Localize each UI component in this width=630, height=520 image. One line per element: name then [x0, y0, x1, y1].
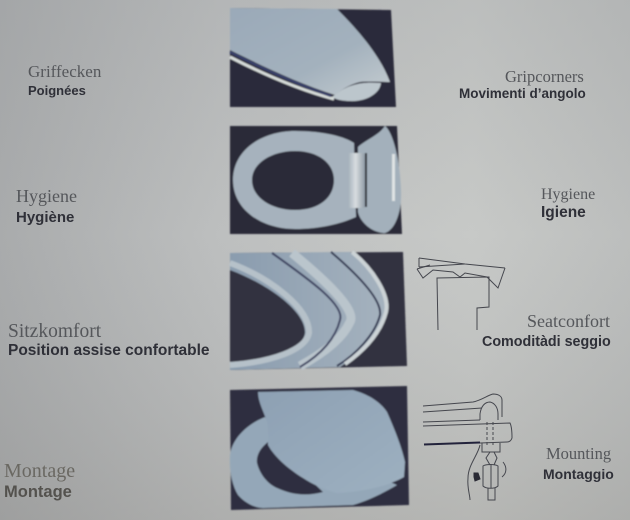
seat ring behind	[230, 417, 397, 508]
lid surface	[230, 8, 390, 95]
label: Sitzkomfort: Sitzkomfort	[8, 321, 102, 342]
groove 2	[331, 252, 380, 366]
seat ring	[233, 131, 356, 229]
diagram: seat cross-section	[417, 258, 505, 330]
label: Sitzkomfort: Position assise confortable	[8, 342, 210, 359]
outer rim light	[345, 252, 387, 364]
base line	[424, 442, 480, 444]
seat rim	[230, 252, 387, 370]
light strip	[230, 57, 334, 99]
label: Seatconfort	[482, 311, 611, 350]
label: Sitzkomfort	[8, 321, 210, 359]
photo: hygiene hinge	[230, 126, 402, 234]
hinge cylinder	[348, 153, 365, 208]
corner lip	[332, 83, 381, 101]
label: Hygiene left: Hygiene	[16, 186, 77, 206]
label: Gripcorners: Gripcorners	[505, 67, 584, 86]
label: Mounting: Mounting	[546, 444, 611, 463]
label: Hygiene right	[541, 186, 595, 221]
label: Griffecken: Poignées	[28, 83, 86, 98]
label: Hygiene left	[16, 186, 77, 226]
dark groove	[230, 52, 331, 96]
photo: grip corner	[230, 8, 396, 107]
label: Seatconfort: Comoditàdi seggio	[482, 334, 611, 350]
hole edge band	[230, 263, 309, 365]
diagram: mounting detail	[423, 394, 512, 500]
label: Seatconfort: Seatconfort	[527, 311, 610, 331]
label: Montage: Montage	[4, 460, 75, 482]
label: Griffecken: Griffecken	[28, 62, 102, 81]
highlight band	[292, 253, 351, 366]
groove 1	[272, 253, 340, 367]
label: Mounting: Montaggio	[543, 466, 614, 482]
label: Hygiene right: Igiene	[541, 204, 586, 221]
label: Hygiene right: Hygiene	[541, 186, 595, 203]
label: Montage: Montage	[4, 483, 72, 501]
label: Mounting	[543, 444, 614, 482]
label: Hygiene left: Hygiène	[16, 209, 74, 226]
photo: mounting	[230, 386, 409, 510]
label: Montage	[4, 460, 75, 501]
label: Gripcorners: Movimenti d’angolo	[459, 86, 586, 101]
hinge plate	[358, 126, 401, 233]
photo: seat comfort	[230, 252, 407, 370]
label: Gripcorners	[459, 67, 586, 101]
tap symbol	[474, 473, 480, 481]
label: Griffecken	[28, 62, 102, 98]
lid	[258, 390, 405, 493]
